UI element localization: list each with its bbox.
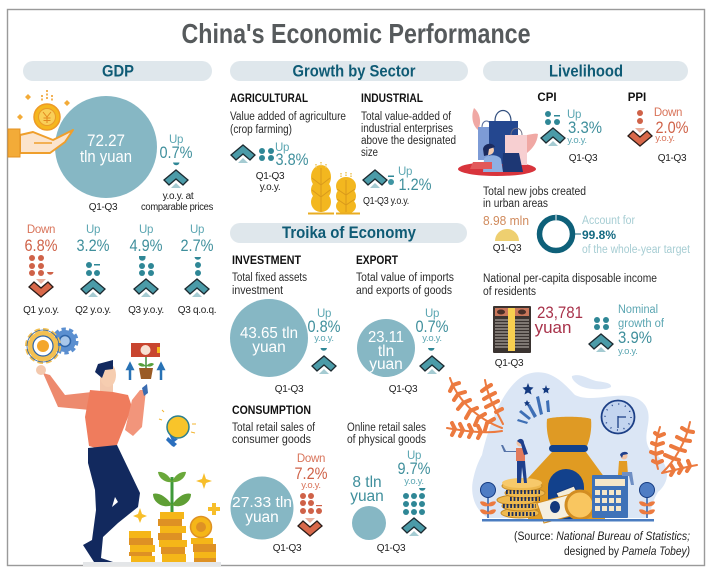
export text: EXPORT: [356, 255, 398, 267]
stat: Q3 up 4.9%: [128, 224, 164, 316]
figure: woman with laptop: [501, 439, 528, 483]
icon: coin stacks with seedling: [129, 472, 220, 562]
label: consumption period: Q1-Q3: [273, 543, 302, 554]
agricultural text: (crop farming): [230, 124, 292, 136]
industrial growth 1.2%: 1.2%: [398, 175, 432, 194]
CPI: y.o.y.: [567, 135, 587, 146]
title: China's Economic Performance: [182, 18, 530, 49]
illustration: shopping bags: [458, 108, 538, 176]
source note: (Source: National Bureau of Statistics;: [514, 531, 690, 543]
stat: Q3 q.o.q. up 2.7%: [178, 224, 216, 316]
illustration: man with gears, plant and coins: [27, 330, 221, 566]
new jobs value: [483, 213, 529, 254]
agricultural text: AGRICULTURAL: [230, 93, 308, 105]
panel: GDP: [8, 61, 216, 316]
icon: light bulb: [159, 410, 196, 447]
GDP circle: [55, 96, 157, 198]
CPI: Up: [567, 109, 581, 121]
label: online retail period: Q1-Q3: [377, 543, 406, 554]
icon: gears: [27, 330, 76, 362]
online retail growth 9.7%: 9.7%: [398, 459, 430, 478]
income value: yuan: [535, 318, 571, 337]
consumption text: [232, 405, 316, 446]
CPI: 3.3%: [568, 118, 602, 137]
export text: and exports of goods: [356, 285, 452, 297]
whole-year target text: [582, 215, 691, 256]
export circle: [357, 319, 415, 377]
CPI: CPI: [537, 92, 557, 104]
export text: [356, 255, 454, 297]
PPI: Q1-Q3: [658, 153, 687, 164]
icon: clock: [602, 400, 634, 434]
whole-year target text: 99.8%: [582, 230, 616, 242]
investment growth 0.8%: Up: [317, 308, 331, 320]
stat: Q3 q.o.q. up 2.7%: Up: [190, 224, 204, 236]
investment growth 0.8%: [308, 308, 340, 374]
PPI: Down: [654, 107, 682, 119]
investment circle: yuan: [252, 339, 286, 356]
income growth 3.9%: 3.9%: [618, 328, 652, 347]
agricultural growth 3.8%: 3.8%: [276, 150, 308, 169]
stat: Q2 up 3.2%: 3.2%: [76, 236, 110, 255]
icon: banknotes and big coin: [537, 486, 594, 523]
online retail growth 9.7%: Up: [407, 450, 421, 462]
heading: Troika of Economy: Troika of Economy: [282, 224, 417, 242]
new jobs text: Total new jobs created: [483, 186, 586, 198]
PPI: 2.0%: [656, 118, 688, 137]
figure: seated man: [618, 452, 634, 485]
online retail text: Online retail sales: [347, 422, 426, 434]
panel: Livelihood: [458, 61, 691, 369]
industrial growth 1.2%: Q1-Q3 y.o.y.: [363, 196, 409, 207]
consumption circle: [230, 476, 294, 540]
income growth 3.9%: Nominal: [618, 304, 658, 316]
industrial text: INDUSTRIAL: [361, 93, 423, 105]
export circle: yuan: [369, 356, 403, 373]
source note: designed by Pamela Tobey): [564, 546, 690, 558]
heading: Livelihood: [483, 61, 688, 81]
panel: Growth by Sector: [230, 61, 468, 214]
heading: Livelihood: Livelihood: [549, 62, 623, 80]
stat: Q3 q.o.q. up 2.7%: Q3 q.o.q.: [178, 305, 216, 316]
online retail text: of physical goods: [347, 434, 426, 446]
investment text: investment: [232, 285, 284, 297]
panel: Troika of Economy: [230, 223, 467, 554]
online retail value: yuan: [350, 488, 384, 505]
PPI: y.o.y.: [655, 133, 675, 144]
CPI: Q1-Q3: [569, 153, 598, 164]
investment text: Total fixed assets: [232, 272, 307, 284]
GDP growth 0.7%: comparable prices: [141, 202, 213, 213]
consumption text: CONSUMPTION: [232, 405, 311, 417]
icon: money plant with up arrows: [128, 343, 164, 380]
GDP growth 0.7%: 0.7%: [160, 143, 192, 162]
consumption decline 7.2%: y.o.y.: [301, 480, 321, 491]
online retail growth 9.7%: y.o.y.: [404, 476, 424, 487]
GDP growth 0.7%: Up: [169, 134, 183, 146]
consumption decline 7.2%: Down: [297, 453, 325, 465]
decoration: orange ferns: [447, 378, 697, 475]
heading: GDP: [23, 61, 212, 81]
donut chart: 99.8%: [540, 215, 581, 250]
income growth 3.9%: y.o.y.: [618, 346, 638, 357]
investment growth 0.8%: 0.8%: [308, 317, 340, 336]
online retail value: 8 tln: [352, 474, 382, 491]
stat: Q1 down 6.8%: Q1 y.o.y.: [23, 305, 59, 316]
whole-year target text: of the whole-year target: [582, 244, 691, 256]
consumption text: Total retail sales of: [232, 422, 316, 434]
label: Q1-Q3: Q1-Q3: [89, 202, 118, 213]
label: investment period: Q1-Q3: [275, 384, 304, 395]
GDP circle: tln yuan: [80, 147, 132, 166]
source note: [514, 531, 690, 558]
income growth 3.9%: [589, 304, 665, 357]
consumption text: consumer goods: [232, 434, 311, 446]
icon: money bag: [528, 417, 605, 520]
stat: Q2 up 3.2%: Up: [86, 224, 100, 236]
investment text: [232, 255, 307, 297]
industrial growth 1.2%: [363, 166, 432, 207]
heading: Growth by Sector: [230, 61, 468, 81]
icon: coin stacks: [497, 478, 545, 518]
new jobs value: Q1-Q3: [493, 243, 522, 254]
investment circle: 43.65 tln: [240, 325, 298, 342]
export text: Total value of imports: [356, 272, 454, 284]
export growth 0.7%: Up: [425, 308, 439, 320]
PPI: PPI: [628, 92, 646, 104]
agricultural growth 3.8%: [231, 142, 308, 193]
export growth 0.7%: [416, 308, 448, 374]
GDP circle: 72.27: [87, 131, 125, 150]
investment circle: [230, 299, 308, 377]
online retail text: [347, 422, 426, 446]
online retail growth 9.7%: [398, 450, 430, 536]
export growth 0.7%: y.o.y.: [422, 333, 442, 344]
whole-year target text: Account for: [582, 215, 635, 227]
agricultural text: [230, 93, 346, 136]
stat: Q2 up 3.2%: Q2 y.o.y.: [75, 305, 111, 316]
stat: Q1 down 6.8%: 6.8%: [24, 236, 58, 255]
heading: GDP: GDP: [102, 62, 134, 80]
income value: 23,781: [537, 303, 583, 322]
income text: of residents: [483, 286, 536, 298]
GDP growth 0.7%: y.o.y. at: [163, 191, 194, 202]
consumption circle: 27.33 tln: [232, 494, 292, 511]
industrial text: [361, 93, 456, 159]
icon: wheat: [308, 162, 360, 214]
consumption circle: yuan: [245, 509, 279, 526]
agricultural growth 3.8%: Up: [275, 142, 289, 154]
industrial text: industrial enterprises: [361, 123, 453, 135]
PPI: [628, 92, 688, 164]
new jobs text: [483, 186, 586, 210]
new jobs value: 8.98 mln: [483, 213, 529, 228]
agricultural growth 3.8%: Q1-Q3: [256, 171, 285, 182]
heading: Troika of Economy: [230, 223, 467, 243]
agricultural growth 3.8%: y.o.y.: [260, 182, 280, 193]
industrial growth 1.2%: Up: [398, 166, 412, 178]
export circle: 23.11: [368, 329, 404, 346]
industrial text: Total value-added of: [361, 111, 452, 123]
income growth 3.9%: growth of: [618, 318, 665, 330]
icon: flowers and base line: [480, 482, 655, 522]
heading: Growth by Sector: Growth by Sector: [292, 62, 416, 80]
industrial text: size: [361, 147, 378, 159]
icon: fireworks: [517, 383, 550, 424]
stat: Q1 down 6.8%: Down: [27, 224, 55, 236]
investment text: INVESTMENT: [232, 255, 301, 267]
income value: [495, 303, 583, 369]
stat: Q3 up 4.9%: Q3 y.o.y.: [128, 305, 164, 316]
new jobs text: in urban areas: [483, 198, 548, 210]
income value: Q1-Q3: [495, 358, 524, 369]
online retail value: [350, 474, 386, 540]
stat: Q1 down 6.8%: [23, 224, 59, 316]
income text: National per-capita disposable income: [483, 273, 657, 285]
industrial text: above the designated: [361, 135, 456, 147]
export circle: tln: [378, 343, 394, 360]
label: export period: Q1-Q3: [389, 384, 418, 395]
icon: hand with coin: [8, 90, 73, 157]
stat: Q2 up 3.2%: [75, 224, 111, 316]
agricultural text: Value added of agriculture: [230, 111, 346, 123]
export growth 0.7%: 0.7%: [416, 317, 448, 336]
investment growth 0.8%: y.o.y.: [314, 333, 334, 344]
stat: Q3 up 4.9%: Up: [139, 224, 153, 236]
illustration: money bag scene: [447, 372, 697, 523]
consumption decline 7.2%: [294, 453, 328, 536]
CPI: [537, 92, 602, 164]
stat: Q3 up 4.9%: 4.9%: [130, 236, 162, 255]
stat: Q3 q.o.q. up 2.7%: 2.7%: [180, 236, 214, 255]
GDP growth 0.7%: [141, 134, 213, 213]
icon: money stack: [493, 306, 531, 353]
consumption decline 7.2%: 7.2%: [294, 464, 328, 483]
income text: [483, 273, 657, 298]
icon: calculator: [592, 475, 628, 518]
